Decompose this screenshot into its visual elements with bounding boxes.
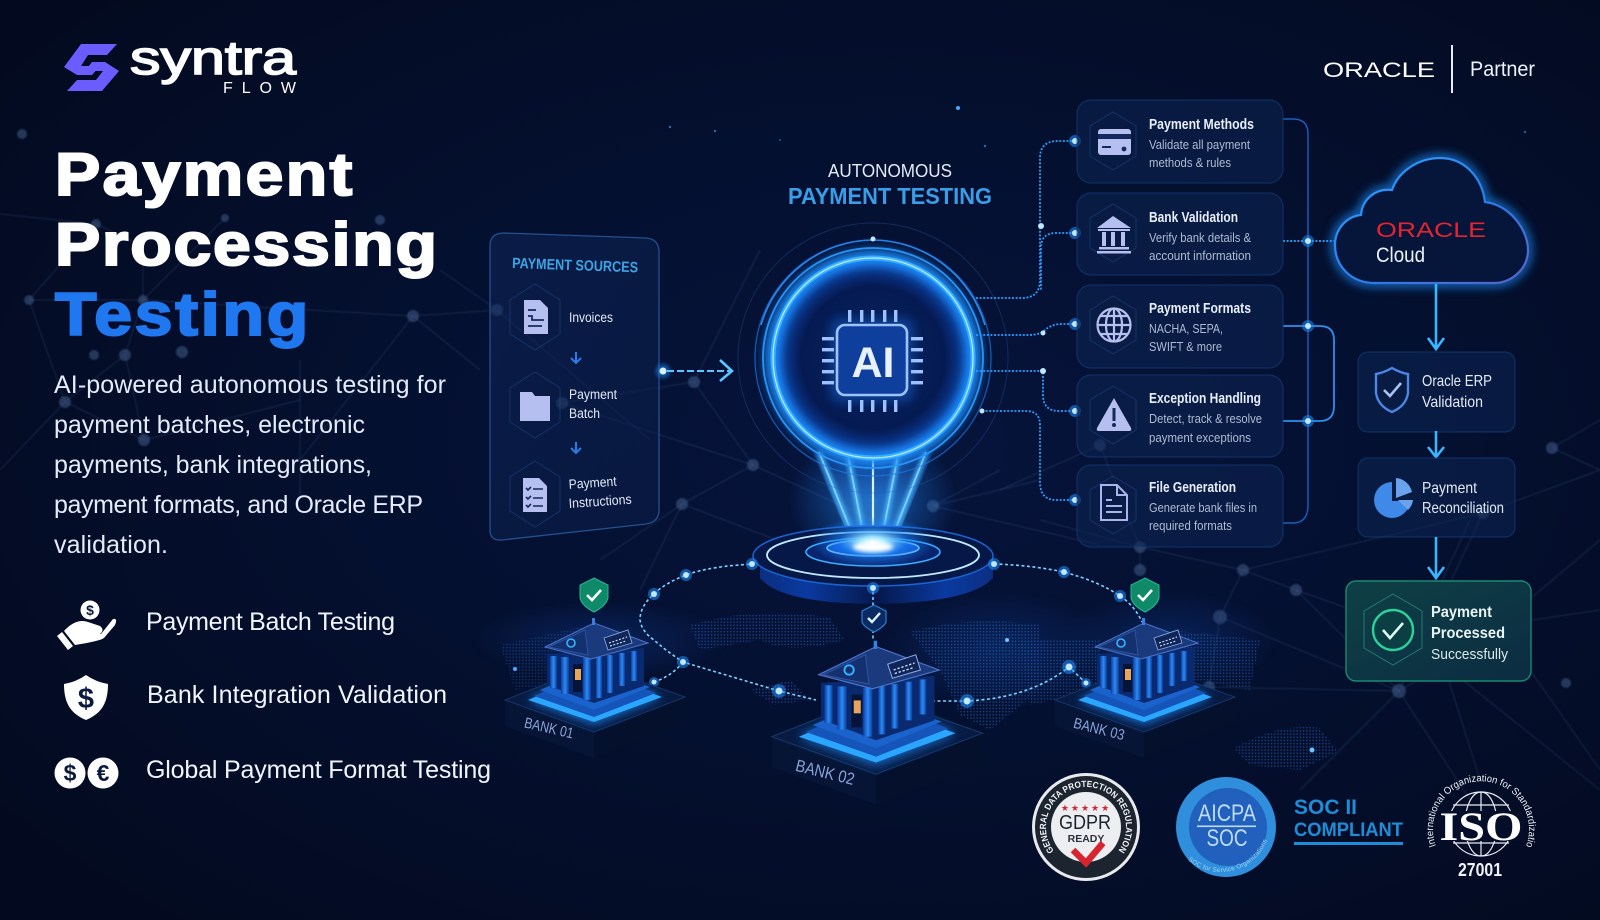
icon: shield dollar: $	[78, 683, 94, 715]
heading: autonomous payment testing: AUTONOMOUS	[828, 161, 952, 181]
arrow: reconciliation to success	[1428, 537, 1444, 578]
title	[55, 141, 437, 348]
world map dots	[470, 590, 1338, 770]
icon: globe	[1098, 308, 1131, 342]
icon: pie chart	[1374, 478, 1413, 518]
card: file generation: Generate bank files in	[1149, 500, 1257, 515]
icon: hand with coin: $	[86, 602, 94, 618]
icon: shield dollar	[64, 675, 108, 720]
card: payment formats: SWIFT & more	[1149, 339, 1222, 354]
icon: currency coins: €	[97, 760, 110, 786]
card: payment reconciliation: Payment	[1422, 480, 1477, 497]
description	[54, 371, 446, 559]
source: payment batch	[510, 372, 617, 438]
oracle wordmark: ORACLE	[1376, 219, 1486, 242]
badge: ISO 27001: ISO	[1440, 804, 1522, 849]
cloud label: Cloud	[1376, 244, 1425, 267]
badge: AICPA SOC	[1176, 740, 1276, 877]
title: Testing	[55, 281, 308, 348]
bank 01 shield	[580, 578, 608, 612]
oracle partner logo	[1323, 45, 1535, 93]
description: validation.	[54, 531, 168, 559]
logo	[64, 31, 297, 97]
source: payment batch: Batch	[569, 406, 600, 421]
card: payment formats: NACHA, SEPA,	[1149, 321, 1223, 336]
source: payment batch: Payment	[569, 387, 617, 402]
description: payment formats, and Oracle ERP	[54, 491, 423, 519]
card: payment processed successfully: Successfully	[1431, 646, 1508, 663]
icon: currency coins: $	[64, 760, 77, 786]
oracle cloud	[1335, 158, 1528, 283]
arrow: sources to AI	[656, 360, 732, 381]
icon: document	[1101, 485, 1127, 520]
sky sparkle dots	[669, 106, 1526, 147]
connector lines: cards to cloud	[1283, 119, 1338, 523]
bank 01 label: BANK 01	[523, 715, 575, 742]
card: exception handling: Detect, track & resolve	[1149, 411, 1262, 426]
logo tagline: FLOW	[223, 80, 297, 97]
badge: ISO 27001: International Organization for Standardization	[1427, 774, 1536, 848]
logo wordmark: syntra	[130, 31, 297, 84]
description: payments, bank integrations,	[54, 451, 372, 479]
card: payment methods	[1077, 100, 1283, 183]
card: payment reconciliation	[1358, 458, 1515, 537]
bank 01	[505, 578, 685, 758]
card: exception handling	[1077, 375, 1283, 457]
card: oracle ERP validation: Oracle ERP	[1422, 373, 1492, 390]
title: Payment	[55, 141, 352, 208]
badge: AICPA SOC: AICPA	[1198, 800, 1256, 827]
bank 02	[772, 605, 982, 805]
orbit nodes	[648, 558, 1126, 708]
badge: SOC II compliant: SOC II	[1294, 796, 1357, 819]
icon: shield check	[1376, 368, 1408, 412]
source: invoices: Invoices	[569, 310, 613, 325]
arrow	[571, 442, 581, 453]
bank 03 label: BANK 03	[1072, 715, 1126, 744]
icon: currency coins	[54, 758, 118, 788]
card: payment processed successfully: Payment	[1431, 604, 1493, 621]
source: payment instructions: Payment	[568, 474, 617, 492]
card: payment formats	[1077, 285, 1283, 368]
badge: SOC II compliant: COMPLIANT	[1294, 820, 1403, 841]
badge: GDPR: ★★★★★	[1061, 803, 1111, 813]
logo mark	[64, 44, 119, 91]
source: payment instructions: Instructions	[568, 492, 632, 511]
feature: bank integration: Bank Integration Validation	[147, 681, 447, 709]
arrow: cloud to ERP	[1428, 284, 1444, 349]
badge: GDPR	[1032, 773, 1140, 881]
badge: SOC II compliant	[1294, 796, 1403, 845]
bank 03 shield	[1131, 578, 1159, 612]
pedestal	[753, 516, 993, 604]
oracle partner logo: Partner	[1470, 58, 1535, 81]
badge: GDPR: GENERAL DATA PROTECTION REGULATION	[1040, 780, 1132, 854]
card: file generation: required formats	[1149, 518, 1232, 533]
card: oracle ERP validation	[1358, 352, 1515, 432]
card: payment methods: Payment Methods	[1149, 117, 1254, 133]
icon: hand with coin	[57, 600, 116, 650]
bank 03	[1055, 578, 1235, 758]
title: Processing	[55, 211, 437, 278]
source: payment instructions	[510, 461, 632, 527]
description: AI-powered autonomous testing for	[54, 371, 446, 399]
card: bank validation: Bank Validation	[1149, 210, 1238, 226]
beams from pedestal	[788, 430, 958, 570]
badge: GDPR: READY	[1068, 833, 1104, 845]
source: invoices	[510, 284, 613, 350]
card: payment formats: Payment Formats	[1149, 301, 1251, 317]
badge: ISO 27001: 27001	[1458, 860, 1502, 880]
icon: success check	[1373, 610, 1413, 650]
card: exception handling: payment exceptions	[1149, 430, 1251, 445]
AI core	[738, 223, 1008, 493]
card: payment processed successfully	[1346, 581, 1531, 681]
heading: autonomous payment testing	[788, 161, 992, 209]
card: payment methods: Validate all payment	[1149, 137, 1250, 152]
arrow	[571, 352, 581, 363]
oracle partner logo: ORACLE	[1323, 59, 1435, 82]
feature: payment batch: Payment Batch Testing	[146, 608, 395, 636]
card: oracle ERP validation: Validation	[1422, 394, 1483, 411]
card: bank validation: account information	[1149, 248, 1251, 263]
bank 02 label: BANK 02	[794, 756, 857, 789]
card: payment processed successfully: Processed	[1431, 625, 1505, 642]
card: exception handling: Exception Handling	[1149, 391, 1261, 407]
panel: payment sources	[490, 233, 659, 540]
description: payment batches, electronic	[54, 411, 365, 439]
icon: credit card	[1098, 129, 1131, 155]
card: payment methods: methods & rules	[1149, 155, 1231, 170]
icon: bank	[1097, 216, 1131, 254]
card: bank validation: Verify bank details &	[1149, 230, 1251, 245]
connector nodes	[980, 135, 1081, 506]
feature: global format: Global Payment Format Testing	[146, 756, 491, 784]
bank network orbit	[640, 558, 1142, 708]
bank 02 shield	[862, 605, 886, 632]
badge: AICPA SOC: SOC	[1206, 825, 1248, 852]
feature list	[54, 600, 491, 788]
card: file generation	[1077, 465, 1283, 547]
background network lines	[0, 129, 1600, 800]
icon: AI chip	[822, 310, 923, 412]
card: bank validation	[1077, 193, 1283, 275]
connector lines: AI to cards	[976, 135, 1081, 506]
badge: AICPA SOC: SOC for Service Organizations	[1188, 840, 1267, 872]
panel heading: PAYMENT SOURCES	[512, 255, 638, 276]
heading: autonomous payment testing: PAYMENT TESTING	[788, 183, 992, 209]
badge: GDPR: GDPR	[1059, 812, 1111, 834]
card: file generation: File Generation	[1149, 480, 1236, 496]
icon: warning	[1097, 398, 1131, 431]
icon: AI chip: AI	[852, 339, 894, 387]
arrow: ERP to reconciliation	[1428, 431, 1444, 457]
card: payment reconciliation: Reconciliation	[1422, 500, 1504, 517]
